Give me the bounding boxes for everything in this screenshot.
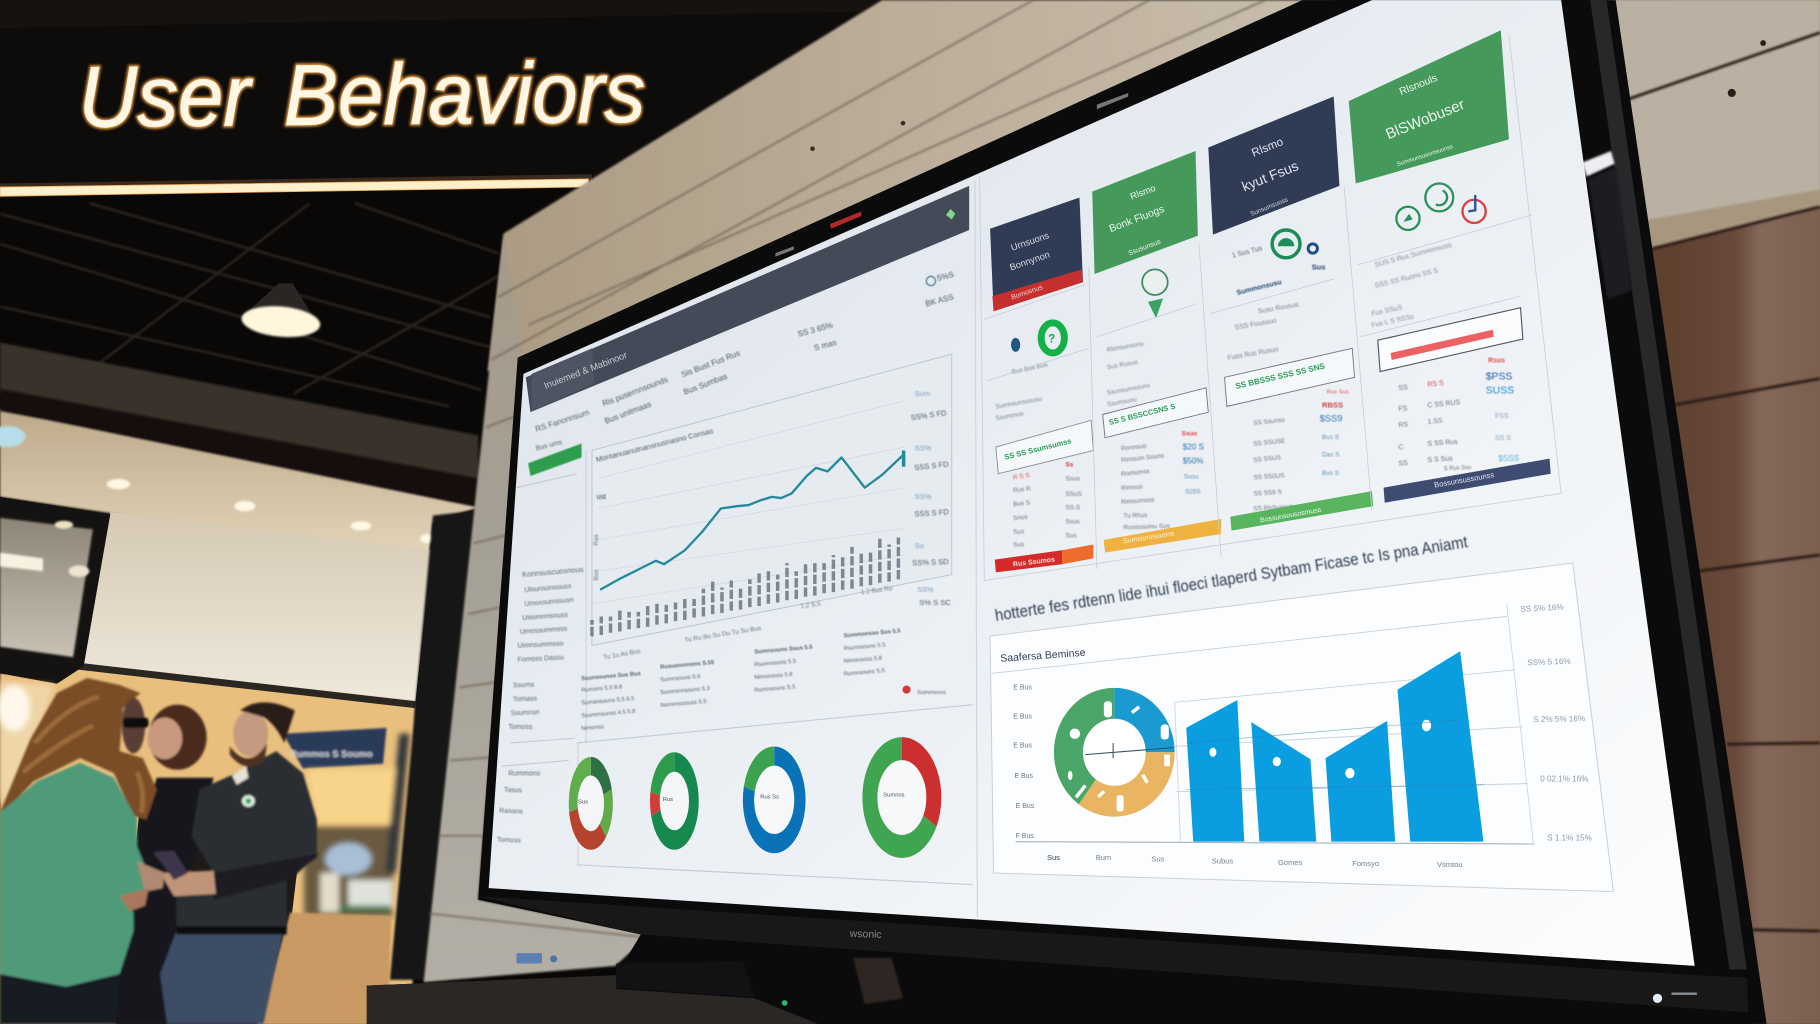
card 4 footer bar <box>1384 459 1551 503</box>
icon: green ring <box>1041 323 1064 353</box>
card 4 rows: S S Sus <box>1427 455 1453 464</box>
card 3 rows: RBSS <box>1322 401 1343 410</box>
card 3 footer bar: Bossunsousosmuss <box>1260 507 1322 524</box>
line series <box>600 455 903 590</box>
y axis labels <box>1013 685 1035 840</box>
x axis labels: Gomes <box>1278 858 1302 867</box>
x axis labels: Vsmtou <box>1437 860 1463 869</box>
panel: bottom chart panel <box>990 563 1613 892</box>
right axis labels: SS% S SD <box>912 557 949 567</box>
chart axis labels: Tu 1u As Bus <box>603 648 641 661</box>
card 4 rows: S SS Rus <box>1427 439 1458 448</box>
card 2 text: Ssunsumsouns <box>1106 382 1151 397</box>
screen <box>489 0 1695 966</box>
card dividers <box>980 35 1561 580</box>
donut 1 <box>573 766 608 840</box>
right axis labels <box>1520 603 1592 842</box>
card 3 header: Sunsumsuoss <box>1249 196 1289 218</box>
card 4 rows: RS S <box>1427 380 1444 389</box>
right axis labels: SS% <box>915 492 932 501</box>
data tables: Sumnsouns Ssus 5.5 <box>754 644 813 656</box>
card 1 rows: Ssus <box>1066 519 1080 526</box>
card 1 footer bar: Rus Ssumos <box>1013 556 1055 569</box>
card 3 rows: SS Rlchussus <box>1253 503 1293 513</box>
header stats text <box>601 270 955 426</box>
wood wall right of monitor <box>1608 0 1820 1024</box>
card 1 text: Bus Bus Bus <box>1011 361 1048 376</box>
chart axis labels: Ras <box>593 534 600 546</box>
card 2 rows: $50% <box>1183 456 1204 465</box>
panel: card 2 <box>1092 151 1221 553</box>
donut 4 <box>870 749 934 846</box>
card 3 footer bar <box>1230 491 1373 531</box>
sidebar: Uimnsummsso <box>517 640 564 650</box>
header stats text: Bus unitmaas <box>603 400 652 426</box>
card 3 rows: Bus S <box>1322 434 1339 441</box>
data tables <box>581 628 946 732</box>
card 1 header <box>990 197 1083 311</box>
card 2 header: Bonk Fluogs <box>1108 204 1166 235</box>
shop lights and counter goods <box>304 734 410 917</box>
person: man in dark shirt <box>153 702 319 1024</box>
card 1 rows: SSuS <box>1066 491 1082 498</box>
card 3 outlined metric: SS BBSSS SSS SS SNS <box>1235 361 1326 391</box>
card 4 rows: S Rus Ssu <box>1444 465 1471 472</box>
card 4 header: BlSWobuser <box>1383 96 1467 143</box>
card 1 rows: Ssuo <box>1066 476 1081 483</box>
card 4 text: SUS S Rus Summonsuss <box>1374 242 1453 269</box>
data tables: Nimonsoss 5.8 <box>843 656 882 665</box>
right axis labels: SS% 5 16% <box>1527 657 1571 667</box>
sidebar: Konnsuscuosnous <box>522 565 584 579</box>
column markers <box>1209 720 1431 778</box>
card 2 rows: Romumss <box>1121 468 1150 478</box>
x axis labels: Sus <box>1047 853 1060 862</box>
panel: left dashboard <box>497 180 977 917</box>
right axis labels: Su <box>915 541 924 550</box>
card 4 rows: 1.SS <box>1427 417 1443 426</box>
card 4 rows: SUSS <box>1486 386 1514 397</box>
x axis labels <box>1047 853 1463 869</box>
donut 3 <box>748 756 800 844</box>
chart sub heading: Saafersa Beminse <box>1000 648 1086 665</box>
card 2 text <box>1106 340 1151 408</box>
navy banner in shop <box>283 728 387 769</box>
chart title: Montanuanutnansnusnasno Consas <box>595 426 714 464</box>
sidebar: Tasos <box>504 787 523 794</box>
card 4 rows: FS <box>1398 405 1408 413</box>
line chart panel frame <box>592 354 952 645</box>
ceiling lamp <box>240 283 322 340</box>
sidebar: Ssumnsn <box>511 709 540 717</box>
alert dot <box>902 686 911 694</box>
card 1 header: Urnsuons <box>1010 230 1051 253</box>
card 1 rows <box>1013 462 1082 549</box>
header stats text: Ris pusernnsounds <box>601 375 669 408</box>
card 3 header <box>1208 96 1339 235</box>
data tables: Rumnsouns S.5 <box>843 668 885 678</box>
data tables: Rumons 5.5 8.8 <box>581 684 622 694</box>
donut center labels <box>578 792 905 805</box>
sidebar: Tomass <box>513 695 538 703</box>
right axis labels: SS% S FD <box>910 408 948 422</box>
card 4 text <box>1371 242 1453 329</box>
card 4 rows: SS S <box>1495 435 1511 442</box>
right axis labels: SSS S FD <box>914 507 950 519</box>
chart axis labels: 1.2 Bus Ru <box>861 585 893 596</box>
card 3 rows: SS SSUS <box>1253 454 1281 464</box>
data tables: Rusuonomons S.55 <box>660 660 715 671</box>
sign light strip <box>0 179 588 196</box>
sidebar: Umossummsss <box>520 626 568 636</box>
card 4 rows: C <box>1398 444 1404 451</box>
sign: user behaviors <box>0 12 859 197</box>
data tables: Ssunsounos Sus Bus <box>581 671 641 682</box>
card 1 rows: Snus <box>1013 514 1028 522</box>
dashboard header bar <box>526 186 969 412</box>
data tables: Ssummsunss 4.5 5.8 <box>581 709 636 719</box>
right axis labels: SS% <box>915 443 932 452</box>
card 4 rows: $SSS <box>1498 454 1520 463</box>
sidebar: RS Fanonnsum <box>534 408 591 434</box>
card 2 rows: Ssuo <box>1182 430 1197 437</box>
card 3 rows: Rus Sus <box>1327 390 1349 396</box>
card 2 text: Sus Rusuo <box>1106 359 1139 371</box>
card 3 text: Susu Rousus <box>1257 301 1300 315</box>
donut center labels: Rus <box>663 797 673 803</box>
header stats text: Sis Bust Fus Rus <box>680 349 741 379</box>
icon: blue figure <box>1011 338 1020 352</box>
divider under tables <box>577 705 973 885</box>
sidebar: Ulsunsonsouss <box>524 583 572 594</box>
right axis labels: SS 5% 16% <box>1520 603 1564 614</box>
heading: bottom panel title: hotterte fes rdtenn lide ihui floeci tlaperd Sytbam Ficase tc Is pna Aniamt <box>994 533 1469 625</box>
card 1 rows: Sus <box>1013 528 1024 536</box>
card 4 rows: RS <box>1398 421 1409 429</box>
chart axis labels: Tu Ru Bu Su Du Tu Su Bus <box>684 625 762 644</box>
navy banner in shop: Rummos S Soumo <box>290 749 373 759</box>
card 1 text <box>995 361 1048 422</box>
card 3 header: Rlsmo <box>1250 135 1285 160</box>
card 4 footer bar: Bossunsussounss <box>1433 470 1495 490</box>
card 2 rows: Susu <box>1184 473 1199 480</box>
card 4 rows: SS <box>1398 460 1408 468</box>
panel: card 1 <box>990 197 1093 572</box>
wall tag <box>517 953 557 964</box>
card 2 outlined metric: SS S BSSCCSNS S <box>1108 402 1176 427</box>
chart grid lines <box>592 401 905 604</box>
card 3 outlined metric <box>1225 348 1355 406</box>
card 4 text: SSS SS Ruons SS S <box>1374 267 1439 290</box>
sidebar: Fomoss Dassu <box>517 654 564 664</box>
icon: green pin <box>1142 269 1168 318</box>
sidebar <box>497 408 591 844</box>
x axis labels: Sus <box>1151 854 1165 863</box>
donut center labels: Rus Ss <box>760 795 779 801</box>
right axis labels: Sum <box>915 389 930 398</box>
card 2 rows <box>1121 430 1205 531</box>
card 4 rows <box>1398 357 1520 472</box>
card 2 footer bar <box>1104 519 1221 553</box>
icon: green ring: ? <box>1048 333 1055 346</box>
right axis labels <box>910 389 951 607</box>
title glow: User Behaviors <box>78 45 646 146</box>
sidebar: Rummons <box>508 770 541 777</box>
card 1 rows: Sus <box>1066 533 1077 540</box>
monitor bezel and stand <box>367 0 1767 1024</box>
data tables: Summsons <box>917 690 946 696</box>
card 3 rows: SS Ssunso <box>1253 417 1286 427</box>
chart axis labels: Bus <box>593 569 600 580</box>
card 4 outlined alert <box>1378 308 1523 372</box>
donut 2 <box>655 762 694 840</box>
icon: green phone ring <box>1425 184 1453 211</box>
card 4 rows: SS <box>1398 384 1408 392</box>
y axis labels: E Bus <box>1013 714 1032 721</box>
wooden counter <box>258 912 391 1024</box>
sidebar separators <box>501 474 577 766</box>
card 3 header: kyut Fsus <box>1239 157 1301 194</box>
person: woman in black <box>110 705 214 1024</box>
power indicator <box>1653 994 1662 1003</box>
column gridline overlay <box>1186 720 1483 789</box>
bar series <box>592 538 898 636</box>
card 2 rows: Ruosssumu Sus <box>1123 523 1170 531</box>
card 4 rows: FSS <box>1495 413 1509 420</box>
card 1 text: Sumnsunsosusu <box>995 396 1043 411</box>
chart axis labels: ust <box>597 494 606 501</box>
sidebar: Tomoss <box>508 724 533 731</box>
data tables: Summonsoo Sus 5.5 <box>843 628 902 639</box>
data tables: Nimonss <box>581 724 604 732</box>
right axis labels: SS% <box>917 585 934 594</box>
grid lines <box>992 616 1528 792</box>
card 2 text: Ssumsuou <box>1106 396 1138 408</box>
monitor logo: wsonic <box>849 929 882 941</box>
data tables: Nomonssouss 5.5 <box>660 699 707 709</box>
card 3 rows: Bus S <box>1322 470 1339 477</box>
card 4 header: Summunsusomsuonss <box>1396 144 1454 168</box>
card 2 rows: Rimsum Souns <box>1121 453 1164 464</box>
card 4 rows: Rsus <box>1488 357 1505 364</box>
card 2 rows: Rimsumoss <box>1121 497 1155 506</box>
card 3 rows: $SS9 <box>1320 413 1342 423</box>
panel: card 3 <box>1208 96 1373 531</box>
icon: green pie ring <box>1272 230 1300 258</box>
card 2 rows: Tu Rhus <box>1123 512 1147 520</box>
card 2 rows: S25S <box>1185 488 1201 495</box>
card 4 text: Fus L S SSSo <box>1371 314 1415 329</box>
y axis labels: F Bus <box>1016 833 1034 840</box>
dashboard header bar: Inuiemed & Mabinoor <box>543 350 628 391</box>
card 2 outlined metric <box>1103 388 1208 438</box>
card 3 rows: SS SSUSE <box>1253 438 1285 448</box>
card 2 rows: Ronnsuo <box>1121 443 1147 452</box>
data tables: Rumnsouns S.5 <box>754 684 796 694</box>
card 3 rows: SS SS9 S <box>1253 489 1282 498</box>
card 3 rows: SS SS0US <box>1253 472 1285 481</box>
header stats text: 5%S <box>936 270 955 283</box>
card 2 rows: $20 S <box>1183 442 1205 451</box>
card 1 rows: Sus <box>1013 541 1024 549</box>
donut chart <box>1068 701 1173 811</box>
card 1 rows: Ss <box>1066 462 1074 469</box>
data tables: Sumnsnnsouns 5.3 <box>660 686 710 696</box>
store interior <box>0 343 482 1024</box>
sidebar: Rasons <box>499 808 523 815</box>
person: woman in green sweater <box>0 678 165 1024</box>
y axis labels: E Bus <box>1013 685 1032 692</box>
sidebar: Uisomnnsouss <box>522 612 568 622</box>
blue column chart <box>1186 651 1483 842</box>
donut center needle <box>1085 743 1173 758</box>
people group <box>0 678 319 1024</box>
sidebar: Ssums <box>513 682 535 689</box>
card 2 footer bar: Sumsunosuuons <box>1123 530 1176 545</box>
x axis labels: Bum <box>1096 853 1111 862</box>
y axis labels: E Bus <box>1013 743 1032 750</box>
icon: blue ring <box>1308 244 1317 253</box>
right axis labels: S 2% 5% 16% <box>1533 714 1585 724</box>
card 2 header <box>1092 151 1198 274</box>
card 1 outlined metric: SS SS Ssumsumss <box>1003 436 1072 462</box>
card 4 rows: C SS RUS <box>1427 399 1461 410</box>
y axis labels: E Bus <box>1016 803 1035 810</box>
data tables: Rsunnsouns 5.5 <box>843 642 886 652</box>
card 3 text: 1 Sus Tus <box>1231 245 1264 260</box>
card 1 rows: Rus R <box>1013 485 1032 494</box>
data tables: Sumnsouns 5.6 <box>660 674 701 683</box>
header stats text: BK ASS <box>924 292 955 308</box>
wood plank wall behind monitor <box>424 0 1335 982</box>
sidebar: Bus ums <box>535 439 563 452</box>
sidebar: Umossumssusn <box>524 597 574 608</box>
donut icons <box>1068 701 1170 811</box>
recessed ceiling lights <box>0 426 434 543</box>
card 1 rows: SS.S <box>1066 505 1080 512</box>
card 4 header <box>1349 30 1509 184</box>
donut center labels: Sumnos <box>883 792 905 798</box>
card 3 text <box>1227 245 1325 362</box>
card 4 header: Rlsnouls <box>1398 73 1439 98</box>
x axis labels: Subus <box>1212 857 1233 866</box>
card 1 header: Bomosnus <box>1011 284 1044 301</box>
y axis labels: E Bus <box>1014 773 1034 780</box>
card 3 rows: Das S <box>1322 451 1339 458</box>
data tables: Nimonsoss 5.8 <box>754 672 793 681</box>
card 1 text: Ssummus <box>995 410 1024 422</box>
header stats text: S mas <box>813 338 838 353</box>
right axis labels: S 1.1% 15% <box>1547 833 1592 842</box>
green button <box>528 444 582 476</box>
right axis labels: SSS S FD <box>914 460 950 472</box>
chart axis labels <box>593 494 893 661</box>
chart axis labels: 1.2 S.5 <box>800 601 822 610</box>
card 1 rows: R S S <box>1013 472 1030 481</box>
data tables: Rsunnsouns 5.5 <box>754 659 796 668</box>
panel: card 4 <box>1349 30 1551 503</box>
shop window <box>0 497 110 804</box>
donut center labels: Sus <box>578 799 588 805</box>
card 2 text: Rlonsunsonu <box>1106 340 1145 354</box>
dark pillar <box>390 511 474 980</box>
card 3 text: Summonsusu <box>1236 279 1282 297</box>
card 1 outlined metric <box>996 420 1093 474</box>
card 2 header: Ssusunsus <box>1128 238 1162 257</box>
card 2 header: Rlsmo <box>1129 183 1157 202</box>
header stats text: Bus Sumbas <box>682 372 728 397</box>
title: User Behaviors <box>78 45 646 146</box>
card 3 text: Sus <box>1312 262 1325 271</box>
card 1 rows: Bus S <box>1013 499 1030 508</box>
card 3 text: SSS Foussuo <box>1234 317 1277 332</box>
card 4 rows: $PSS <box>1486 372 1512 383</box>
x axis labels: Fomsyo <box>1352 859 1379 868</box>
card 2 rows: Rimsuo <box>1121 483 1143 492</box>
right axis labels: 0 02.1% 16% <box>1540 774 1589 783</box>
data tables: Sumansouns 5.5 6.5 <box>581 696 635 707</box>
header stats text: SS 3 65% <box>797 321 834 339</box>
card 3 rows <box>1253 390 1349 513</box>
card 4 text: Fus SSuS <box>1371 304 1403 318</box>
right axis labels: S% S SC <box>919 598 951 607</box>
card 1 footer bar <box>995 544 1093 572</box>
sidebar: Tomoss <box>497 837 521 844</box>
icon: red clock ring <box>1462 195 1486 223</box>
top camera bar <box>775 93 1128 257</box>
card 1 header: Bonnynon <box>1008 249 1051 272</box>
card 3 text: Fuss Rus Rusuo <box>1227 346 1279 362</box>
icon: green pin ring <box>1396 207 1420 230</box>
